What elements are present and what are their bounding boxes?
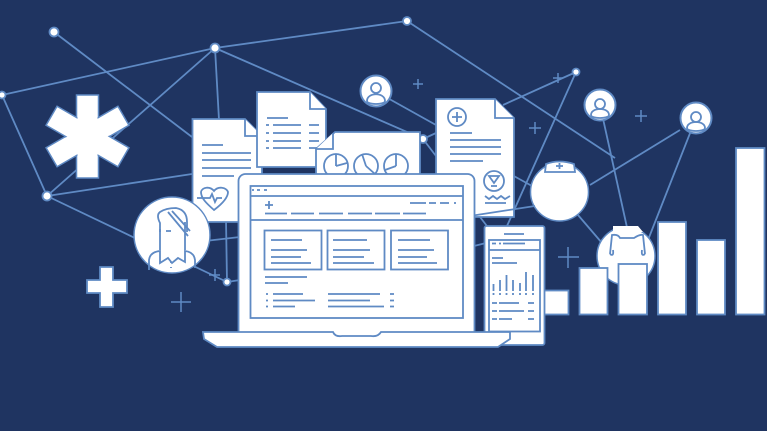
icon: doctor	[597, 226, 655, 285]
smartphone	[484, 226, 544, 345]
network lines	[2, 21, 696, 282]
icon: patient avatar 3	[680, 102, 712, 134]
icon: patient avatar 1	[360, 76, 392, 106]
document: health record	[192, 119, 262, 222]
small plus marks	[171, 73, 647, 312]
icon: nurse	[530, 162, 588, 221]
document: pie charts	[316, 132, 420, 180]
icon: patient avatar 2	[584, 90, 616, 120]
laptop screen	[250, 186, 463, 318]
icon: plus sign	[87, 267, 127, 307]
document: text report	[257, 92, 326, 167]
connector line across certificate	[470, 206, 535, 216]
icon: woman portrait	[134, 197, 210, 273]
bar chart	[541, 148, 764, 314]
network nodes	[0, 17, 580, 286]
document: certificate	[436, 99, 514, 217]
laptop	[238, 174, 474, 339]
laptop base	[203, 332, 510, 347]
icon: medical asterisk	[46, 95, 129, 178]
